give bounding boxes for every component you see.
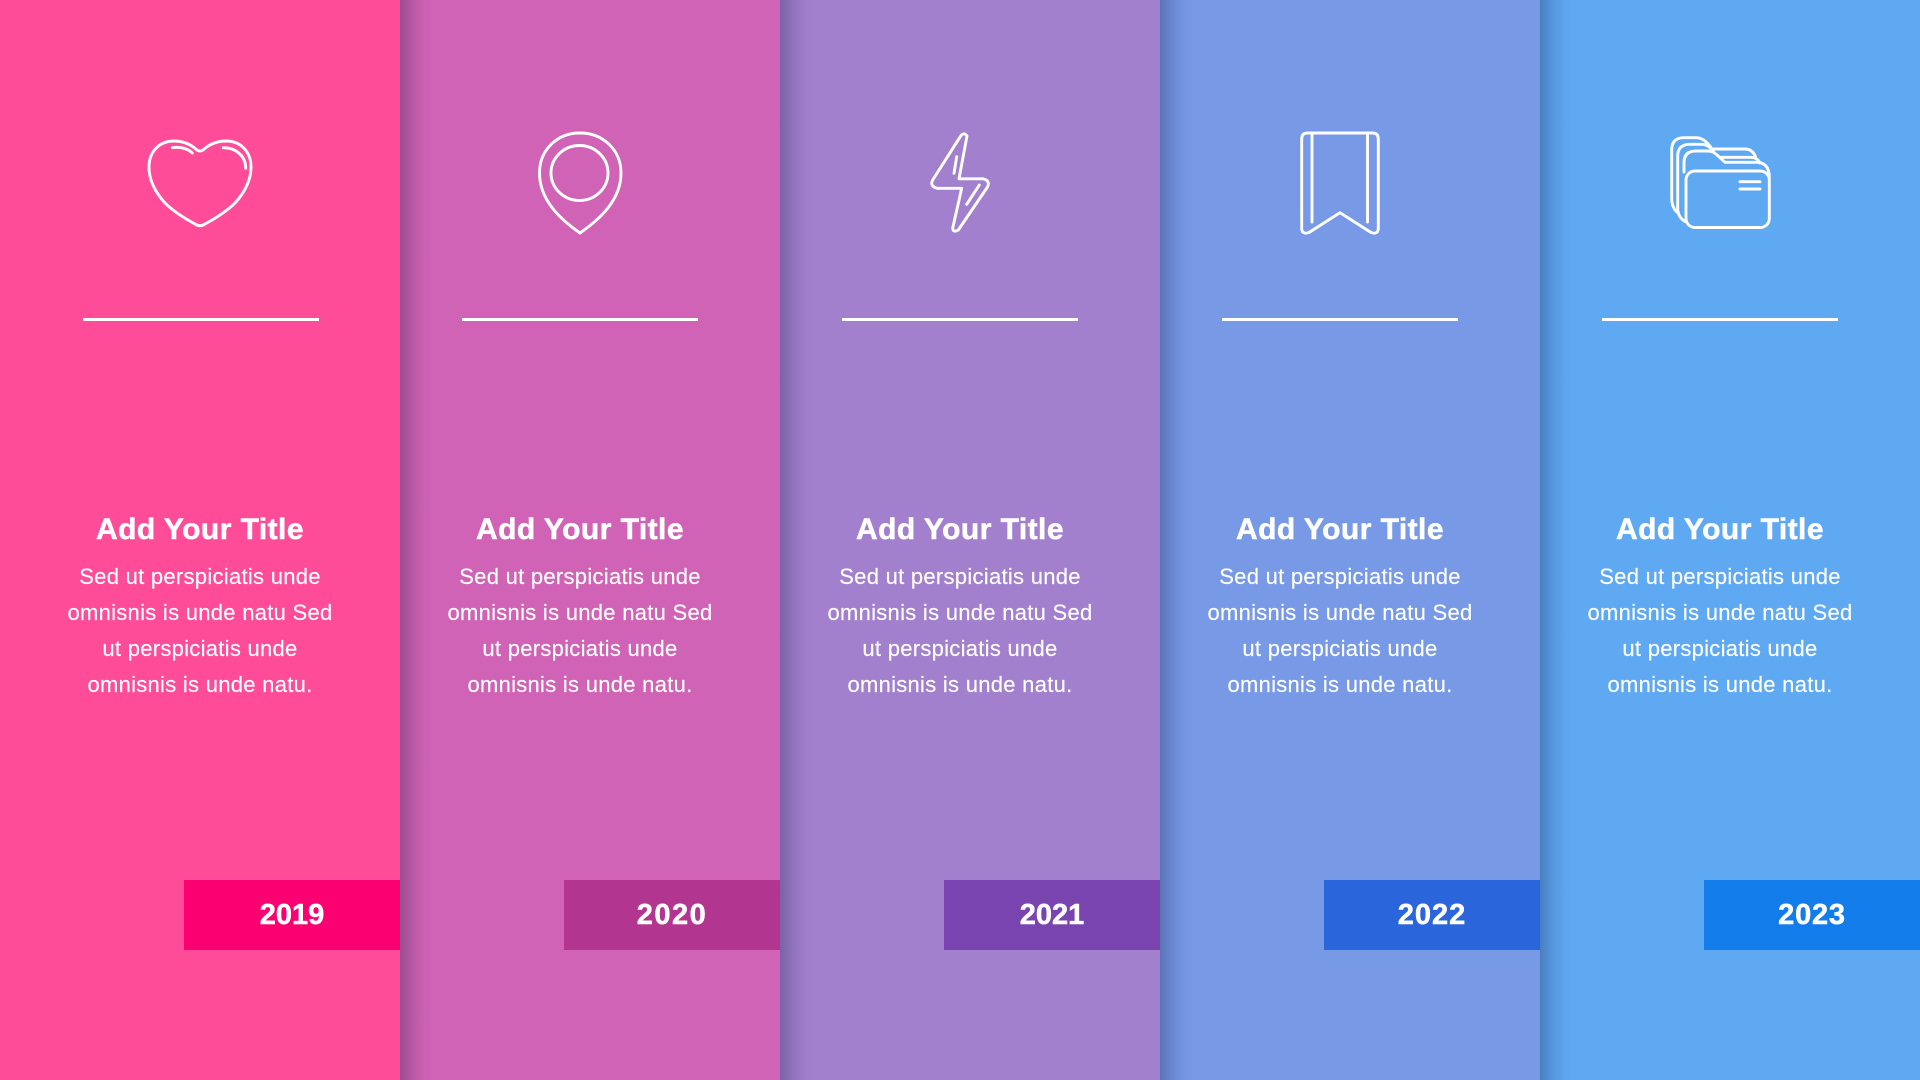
text block: ut perspiciatis unde [1622,636,1818,661]
shadow [1540,0,1574,1080]
shadow [780,0,814,1080]
panel: 2023 [1540,0,1920,1080]
shadow [400,0,434,1080]
panel: 2019 [0,0,400,1080]
text block: omnisnis is unde natu. [1227,672,1453,697]
text block: omnisnis is unde natu Sed [827,600,1093,625]
year tag [1704,880,1920,950]
year tag [944,880,1160,950]
divider [1602,318,1838,320]
heading: Add Your Title [96,513,304,546]
icon: heart [148,140,252,228]
year tag: 2019 [260,899,324,931]
year tag: 2022 [1398,899,1466,931]
year tag [184,880,400,950]
text block: omnisnis is unde natu. [1607,672,1833,697]
text block [827,564,1093,697]
year tag: 2023 [1778,899,1846,931]
shadow [1160,0,1194,1080]
text block [447,564,713,697]
text block: Sed ut perspiciatis unde [839,564,1081,589]
year tag [564,880,780,950]
divider [462,318,698,320]
panel: 2022 [1160,0,1540,1080]
text block [1587,564,1853,697]
icon: folders [1670,136,1771,229]
text block: omnisnis is unde natu Sed [67,600,333,625]
year tag [1324,880,1540,950]
text block: omnisnis is unde natu Sed [1207,600,1473,625]
heading: Add Your Title [1236,513,1444,546]
text block: Sed ut perspiciatis unde [1219,564,1461,589]
icon: map pin [538,132,622,234]
panel: 2021 [780,0,1160,1080]
text block [67,564,333,697]
year tag: 2020 [637,899,707,931]
divider [842,318,1078,320]
heading: Add Your Title [856,513,1064,546]
text block: omnisnis is unde natu. [847,672,1073,697]
text block: ut perspiciatis unde [102,636,298,661]
divider [82,318,318,320]
text block: ut perspiciatis unde [862,636,1058,661]
heading: Add Your Title [1616,513,1824,546]
text block: omnisnis is unde natu Sed [447,600,713,625]
icon: bookmark [1300,132,1380,235]
text block: ut perspiciatis unde [482,636,678,661]
text block: Sed ut perspiciatis unde [1599,564,1841,589]
heading: Add Your Title [476,513,684,546]
text block: omnisnis is unde natu Sed [1587,600,1853,625]
year tag: 2021 [1020,899,1084,931]
text block: omnisnis is unde natu. [87,672,313,697]
text block [1207,564,1473,697]
panel: 2020 [400,0,780,1080]
text block: ut perspiciatis unde [1242,636,1438,661]
text block: omnisnis is unde natu. [467,672,693,697]
icon: lightning bolt [930,132,990,233]
text block: Sed ut perspiciatis unde [459,564,701,589]
divider [1222,318,1458,320]
text block: Sed ut perspiciatis unde [79,564,321,589]
